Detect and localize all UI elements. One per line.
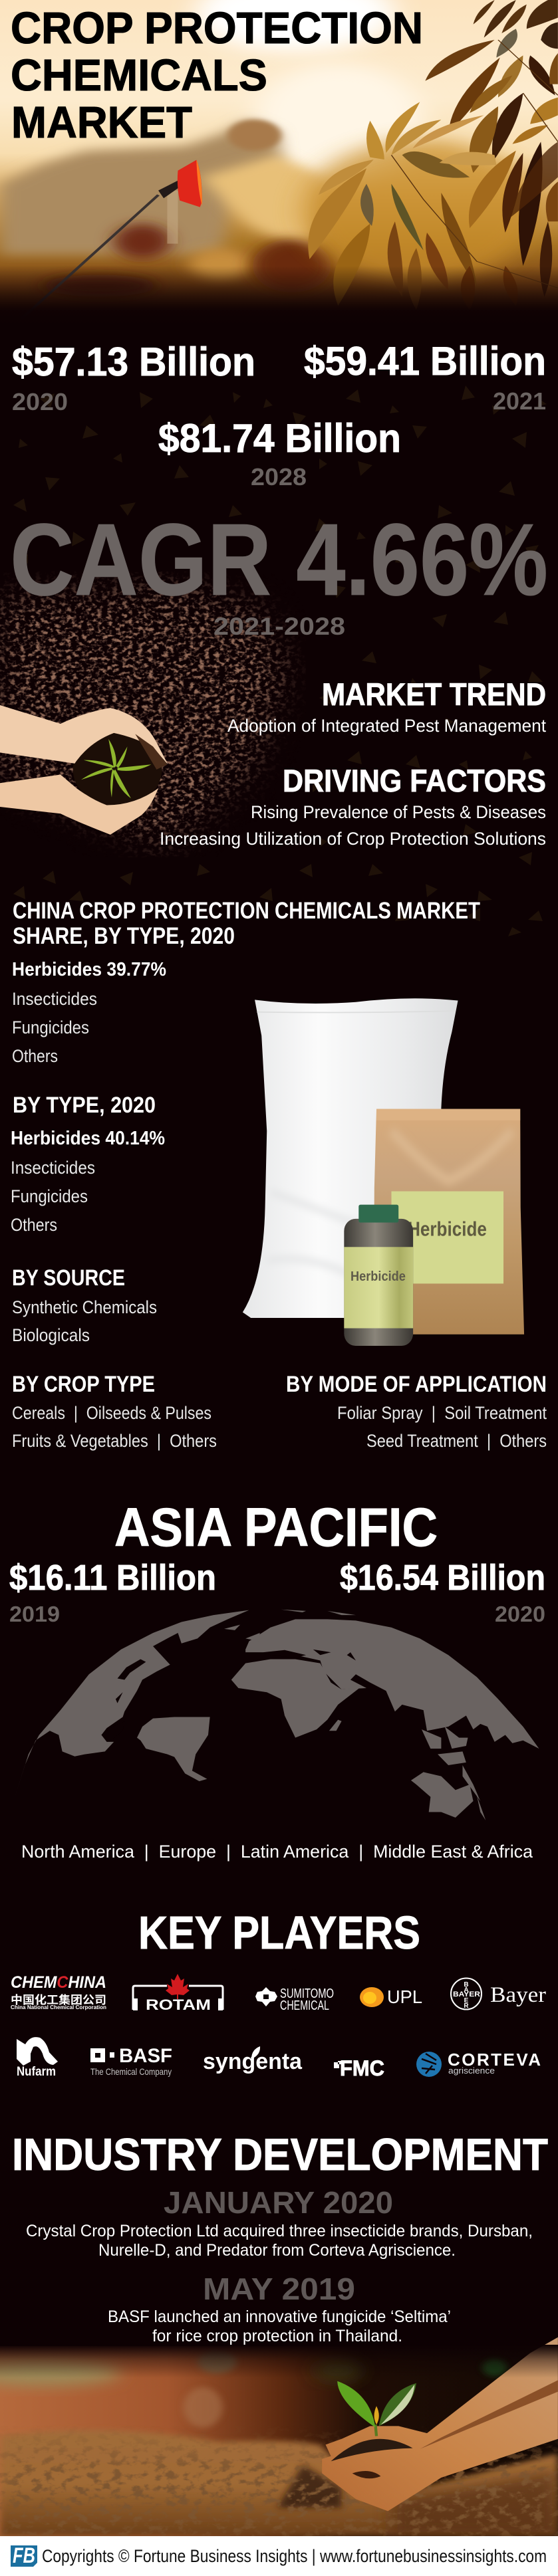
factor list: Rising Prevalence of Pests & Diseases [251,802,546,822]
logo: Sumitomo Chemical: SUMITOMO [280,1986,334,2001]
title: CROP PROTECTION [11,3,423,53]
sprout [337,2381,416,2436]
logo: BASF [90,2045,172,2077]
logo: ChemChina: CHEMCHINA [11,1973,106,1992]
logo: Corteva: CORTEVA [448,2050,541,2070]
soil mound [331,2439,413,2461]
panel: market size figures [12,339,546,490]
footer bar [0,2536,558,2576]
logo: Nufarm: Nufarm [17,2065,56,2079]
list: by source: Synthetic Chemicals [12,1297,157,1317]
logo: FMC: FMC [340,2056,384,2080]
logo: BASF: The Chemical Company [90,2066,172,2077]
hands [322,2337,558,2511]
list: by source: Biologicals [12,1325,90,1345]
list: by crop type: BY CROP TYPE [12,1372,155,1397]
logo: Bayer: A [464,1986,469,1994]
logo: Bayer: B [464,1981,469,1988]
list: by source [12,1265,157,1345]
year 2020: 2020 [12,388,68,415]
development: May 2019: BASF launched an innovative fungicide ‘Seltima’ [108,2308,451,2326]
list: by type 2020: Others [11,1215,57,1235]
list: China share by type: Herbicides 39.77% [12,959,166,980]
seedling [81,739,151,798]
Asia Pacific 2019 figure: 2019 [9,1602,60,1626]
sprayer nozzle [158,160,202,207]
heading: Asia Pacific: ASIA PACIFIC [114,1497,438,1558]
list: by mode of application [286,1372,547,1451]
list: China share by type: Insecticides [12,989,97,1009]
development: January 2020 [26,2185,533,2260]
year 2028: 2028 [251,463,307,490]
development: May 2019 [108,2272,451,2345]
list: by crop type: Cereals | Oilseeds & Pulses [12,1403,211,1423]
kraft bag [374,1109,524,1335]
development: January 2020: Nurelle-D, and Predator from Corteva Agriscience. [98,2241,456,2260]
development: May 2019: MAY 2019 [203,2272,355,2306]
heading: key players: KEY PLAYERS [138,1907,420,1959]
logo: ChemChina [11,1973,106,2010]
title: MARKET [11,98,192,148]
driving factors [160,763,546,849]
illustration: product packages [243,998,524,1346]
list: by type 2020: Herbicides 40.14% [11,1128,165,1149]
bottle [344,1205,413,1346]
logo: ChemChina: 中国化工集团公司 [11,1993,106,2006]
Asia Pacific 2020 figure: 2020 [495,1602,545,1626]
factor list [160,802,546,849]
list: by source: BY SOURCE [12,1265,125,1291]
title: CHEMICALS [11,51,267,100]
list: by crop type: Fruits & Vegetables | Others [12,1431,217,1451]
development: January 2020: Crystal Crop Protection Ltd acquired three insecticide brands, Dursban, [26,2222,533,2240]
logo: Bayer: R [464,2002,469,2010]
bottle label text: Herbicide [350,1269,406,1284]
sprayer wand [21,195,158,319]
list: by type 2020: BY TYPE, 2020 [13,1093,156,1118]
bottom photo: seedling in hands over soil [0,2337,558,2536]
icon: hands holding seedling [0,705,168,835]
logo: Sumitomo Chemical [255,1986,334,2013]
logo: UPL: UPL [387,1986,422,2007]
logo: Bayer: E [464,1997,469,2004]
logo: Syngenta: syngenta [203,2049,303,2074]
development: January 2020: JANUARY 2020 [164,2185,393,2220]
soil texture backdrop [0,572,306,857]
list: by type 2020: Insecticides [11,1158,95,1178]
logo: Bayer: Bayer [490,1983,546,2007]
bag label text: Herbicide [408,1218,487,1241]
trend text: Adoption of Integrated Pest Management [227,716,546,736]
hero photo: crop sprayer and leaves [0,0,558,326]
logo: Corteva [416,2050,541,2077]
list: by type 2020 [11,1093,165,1235]
logo: BASF: BASF [119,2045,172,2067]
logo: Sumitomo Chemical: CHEMICAL [280,1998,329,2013]
list: China share by type: Fungicides [12,1018,89,1037]
white sack [243,998,458,1318]
year 2021: 2021 [493,387,546,415]
world map globe [14,1610,539,1820]
bag label [391,1191,503,1283]
heading: China market share: SHARE, BY TYPE, 2020 [13,923,235,949]
logo: Corteva: agriscience [448,2066,495,2076]
Asia Pacific 2019 figure [9,1558,216,1626]
leaves [308,0,558,310]
logo: UPL [360,1986,422,2007]
other regions list: North America | Europe | Latin America | Middle East & Africa [21,1842,533,1862]
list: by crop type [12,1372,217,1451]
Asia Pacific 2020 figure [340,1558,545,1626]
market trend [227,677,546,736]
value 2021: $59.41 Billion [304,339,546,383]
CAGR period: 2021-2028 [213,613,345,640]
logo: Nufarm [17,2037,58,2079]
logo: ChemChina: China National Chemical Corporation [11,2004,106,2010]
Asia Pacific 2019 figure: $16.11 Billion [9,1558,216,1598]
heading: China market share [13,898,480,949]
logo: Rotam: ROTAM [146,1996,211,2013]
value 2020: $57.13 Billion [12,340,255,384]
heading: China market share: CHINA CROP PROTECTION CHEMICALS MARKET [13,898,480,924]
title [11,3,423,148]
list: China share by type [12,959,166,1066]
logo: Rotam [133,1974,223,2013]
factor list: Increasing Utilization of Crop Protection Solutions [160,829,546,849]
value 2028: $81.74 Billion [158,416,401,461]
list: China share by type: Others [12,1046,58,1066]
footer logo: FB [13,2543,35,2567]
logo: Bayer [451,1978,546,2010]
development: May 2019: for rice crop protection in Thailand. [152,2327,402,2345]
logo: Bayer: BAYER [453,1990,480,1998]
list: by type 2020: Fungicides [11,1186,88,1206]
faint triangle pattern [13,385,547,936]
